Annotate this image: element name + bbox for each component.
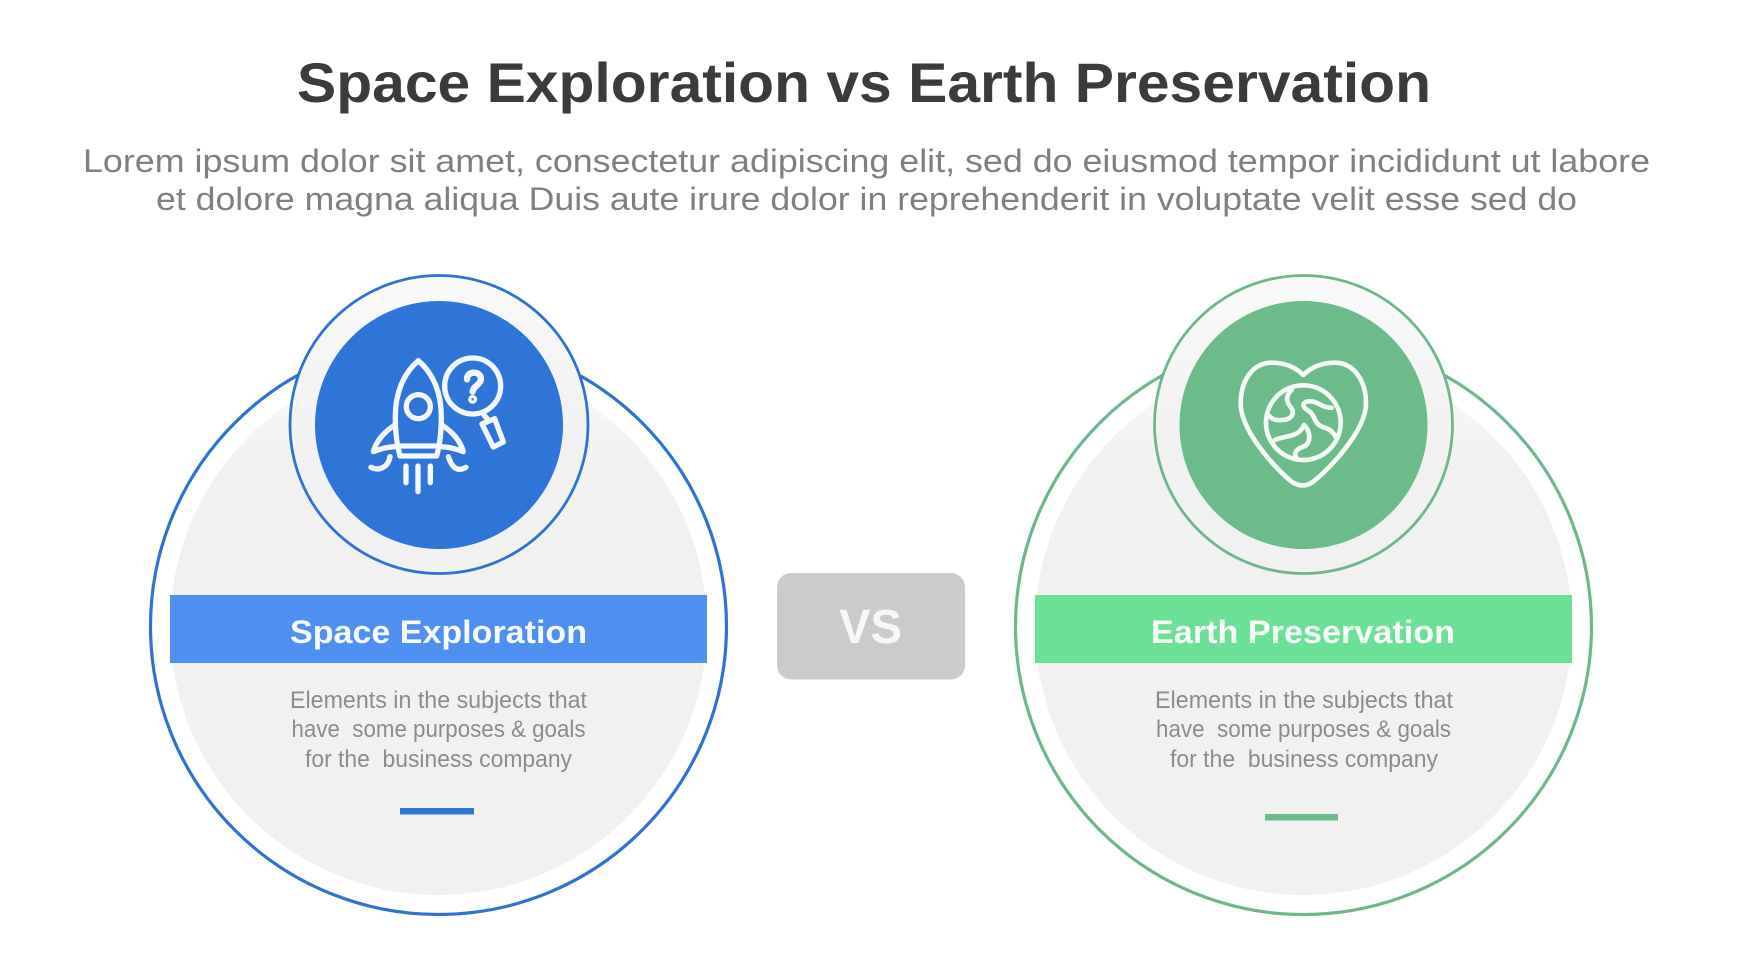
- band: [170, 595, 707, 663]
- body text: Elements in the subjects that: [1155, 687, 1453, 714]
- icon badge disc: [1180, 301, 1428, 549]
- band heading: Earth Preservation: [1151, 614, 1455, 650]
- title: Space Exploration vs Earth Preservation: [297, 51, 1431, 114]
- icon badge disc: [315, 301, 563, 549]
- band heading: Space Exploration: [290, 614, 587, 650]
- icon badge ring: [1154, 276, 1452, 574]
- icon: earth in heart: [1241, 363, 1366, 485]
- accent dash: [1265, 814, 1338, 820]
- accent dash: [400, 808, 474, 814]
- body text: for the business company: [305, 746, 573, 773]
- body text: have some purposes & goals: [1156, 716, 1451, 743]
- subtitle text block: Lorem ipsum dolor sit amet, consectetur adipiscing elit, sed do eiusmod tempor incididunt ut labore: [83, 143, 1650, 179]
- icon: rocket with magnifier: [371, 358, 503, 492]
- panel: space exploration: [150, 276, 726, 914]
- body text: [1155, 687, 1453, 773]
- vs badge: VS: [839, 601, 902, 654]
- vs badge: [777, 573, 965, 680]
- body text: [290, 687, 587, 773]
- outer ring: [1016, 338, 1592, 914]
- subtitle text block: et dolore magna aliqua Duis aute irure dolor in reprehenderit in voluptate velit esse sed do: [156, 181, 1577, 217]
- body text: Elements in the subjects that: [290, 687, 587, 714]
- band: [1035, 595, 1572, 663]
- panel: earth preservation: [1016, 276, 1592, 914]
- inner grey disc: [170, 358, 707, 895]
- subtitle text block: [83, 143, 1650, 217]
- inner grey disc: [1035, 358, 1572, 895]
- body text: for the business company: [1170, 746, 1439, 773]
- outer ring: [150, 338, 726, 914]
- body text: have some purposes & goals: [292, 716, 586, 743]
- icon badge ring: [290, 276, 588, 574]
